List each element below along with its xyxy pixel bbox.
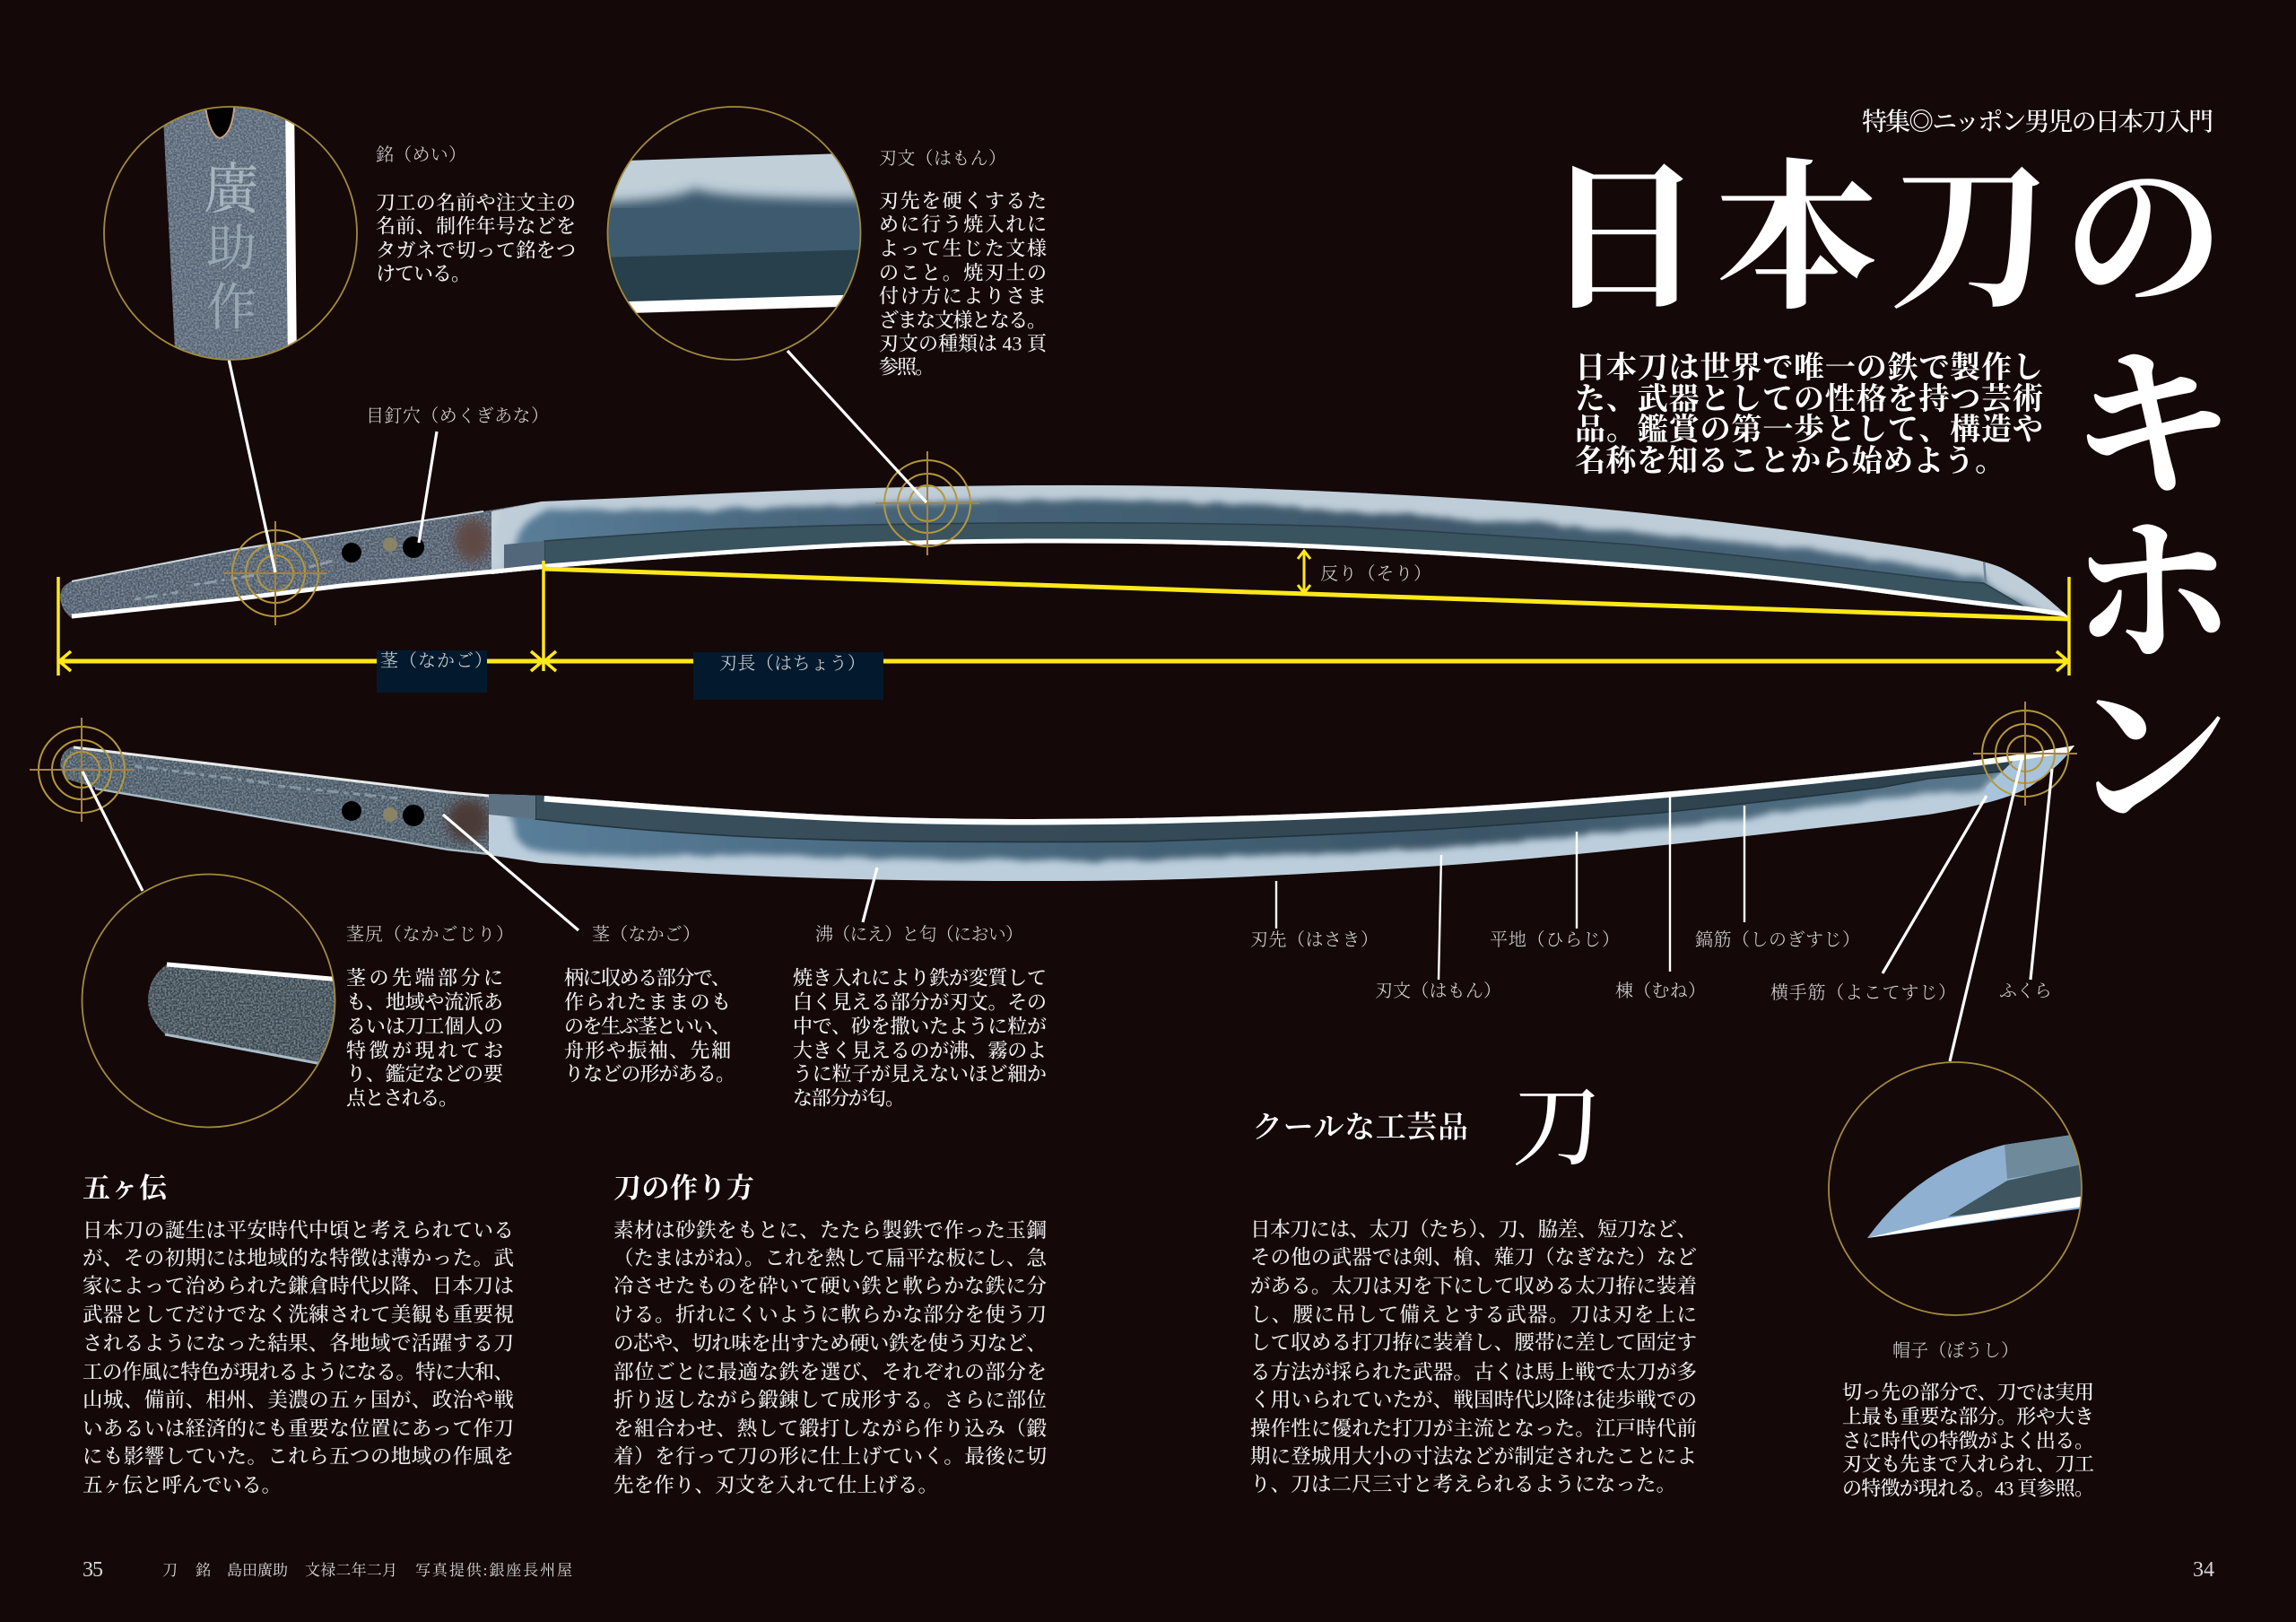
- column: katana types: る方法が採られた武器。古くは馬上戦で太刀が多: [1250, 1361, 1697, 1383]
- column: how swords are made: 部位ごとに最適な鉄を選び、それぞれの部分を: [613, 1361, 1047, 1383]
- column: gokaden: [83, 1173, 514, 1496]
- lead paragraph: 品。鑑賞の第一歩として、構造や: [1575, 413, 2043, 447]
- text: nie and nioi: うに粒子が見えないほど細か: [793, 1062, 1047, 1086]
- text: nakagojiri: 茎の先端部分に: [346, 967, 503, 989]
- column: katana types: その他の武器では剣、槍、薙刀（なぎなた）など: [1250, 1246, 1697, 1269]
- column: how swords are made: の芯や、切れ味を出すため硬い鉄を使う刃など、: [613, 1332, 1047, 1355]
- label box: blade length: 刃長（はちょう）: [719, 653, 865, 674]
- text: nakagojiri: 点とされる。: [346, 1087, 458, 1109]
- footer: photo caption: 刀: [162, 1562, 178, 1579]
- part labels under lower sword: 棟（むね）: [1615, 981, 1706, 1001]
- close-up photo: [608, 154, 860, 313]
- title: ン: [2068, 670, 2230, 849]
- column: gokaden: 工の作風に特色が現れるようになる。特に大和、: [83, 1361, 514, 1383]
- leader lines: [83, 351, 2052, 1061]
- close-up photo: 作: [206, 281, 257, 336]
- footer: photo caption: 写真提供:銀座長州屋: [415, 1562, 572, 1579]
- text: nie and nioi: 中で、砂を撒いたように粒が: [793, 1016, 1047, 1037]
- close-up photo: [162, 99, 297, 368]
- label box: blade length: [693, 652, 883, 700]
- close-up photo: 廣: [204, 160, 262, 221]
- column: katana types: [1250, 1218, 1697, 1496]
- lead paragraph: [1575, 351, 2043, 478]
- panel: nakagojiri close-up: [83, 874, 341, 1127]
- close-up photo: [1867, 1132, 2090, 1238]
- part labels under lower sword: 横手筋（よこてすじ）: [1770, 982, 1956, 1003]
- text: mei: けている。: [376, 262, 471, 285]
- label: sori: 反り（そり）: [1320, 564, 1431, 584]
- part labels under lower sword: 平地（ひらじ）: [1490, 929, 1620, 950]
- text: mei: 銘（めい）: [376, 144, 466, 165]
- text: nie and nioi: 大きく見えるのが沸、霧のよ: [793, 1039, 1047, 1062]
- text: mei: タガネで切って銘をつ: [376, 239, 576, 262]
- column: gokaden: 武器としてだけでなく洗練されて美観も重要視: [83, 1304, 514, 1326]
- target: nakagojiri: [30, 718, 134, 822]
- label: mekugi-ana: 目釘穴（めくぎあな）: [366, 406, 549, 426]
- panel: mei close-up: [104, 99, 357, 368]
- text: nie and nioi: な部分が匂。: [793, 1087, 905, 1109]
- text: nakago: 作られたままのも: [564, 990, 731, 1014]
- column: how swords are made: 先を作り、刃文を入れて仕上げる。: [613, 1474, 938, 1496]
- heading: katana: [1252, 1078, 1602, 1178]
- text: nie and nioi: 沸（にえ）と匂（におい）: [815, 924, 1023, 945]
- text: hamon: のこと。焼刃土の: [879, 262, 1047, 283]
- footer: photo caption: 文禄二年二月: [305, 1561, 397, 1579]
- tang: [60, 746, 541, 861]
- text: hamon: よって生じた文様: [879, 237, 1047, 260]
- text: mei: 刀工の名前や注文主の: [376, 192, 576, 214]
- sword: upper, edge up: [60, 484, 2068, 619]
- kicker: feature heading: 特集◎ニッポン男児の日本刀入門: [1862, 108, 2213, 136]
- sword: lower, edge down: [60, 746, 2074, 881]
- column: katana types: 日本刀には、太刀（たち）、刀、脇差、短刀など、: [1250, 1218, 1697, 1241]
- text: hamon: 刃先を硬くするた: [879, 190, 1047, 212]
- frame: [608, 107, 861, 360]
- text: boshi: の特徴が現れる。43 頁参照。: [1842, 1477, 2094, 1500]
- text: hamon: [879, 148, 1048, 379]
- lead paragraph: た、武器としての性格を持つ芸術: [1575, 382, 2043, 416]
- column: gokaden: 五ヶ伝: [83, 1173, 170, 1204]
- column: katana types: して収める打刀拵に装着し、腰帯に差して固定す: [1250, 1331, 1697, 1354]
- target: boshi: [1973, 702, 2077, 806]
- frame: [1829, 1062, 2082, 1315]
- text: hamon: 刃文（はもん）: [879, 148, 1006, 169]
- text: nie and nioi: 焼き入れにより鉄が変質して: [793, 967, 1047, 989]
- footer: photo caption: [162, 1561, 572, 1579]
- label box: nakago: 茎（なかご）: [380, 650, 492, 671]
- column: katana types: し、腰に吊して備えとする武器。刀は刃を上に: [1250, 1304, 1697, 1326]
- text: hamon: 参照。: [879, 355, 935, 379]
- text: boshi: 刃文も先まで入れられ、刀工: [1842, 1453, 2094, 1475]
- blade: [491, 484, 2068, 617]
- column: how swords are made: 冷させたものを砕いて硬い鉄と軟らかな鉄に分: [613, 1275, 1047, 1297]
- text: hamon: めに行う焼入れに: [879, 214, 1047, 235]
- heading: katana: クールな工芸品: [1252, 1111, 1468, 1145]
- text: nakago: 茎（なかご）: [592, 924, 700, 945]
- column: gokaden: いあるいは経済的にも重要な位置にあって作刀: [83, 1417, 514, 1440]
- tang: [60, 501, 542, 618]
- column: how swords are made: 刀の作り方: [613, 1173, 754, 1204]
- footer: photo caption: 島田廣助: [227, 1562, 288, 1579]
- text: nakagojiri: り、鑑定などの要: [346, 1062, 503, 1086]
- text: nie and nioi: 白く見える部分が刃文。その: [793, 990, 1047, 1014]
- lead paragraph: 日本刀は世界で唯一の鉄で製作し: [1575, 351, 2043, 385]
- column: how swords are made: を組合わせ、熱して鍛打しながら作り込み（鍛: [613, 1417, 1047, 1440]
- text: boshi: 上最も重要な部分。形や大き: [1842, 1405, 2094, 1428]
- arrow: sori: [1298, 551, 1310, 593]
- column: katana types: がある。太刀は刃を下にして収める太刀拵に装着: [1250, 1275, 1697, 1297]
- text: nie and nioi: [793, 924, 1047, 1109]
- text: hamon: 刃文の種類は 43 頁: [879, 332, 1048, 355]
- label box: nakago: [377, 650, 492, 693]
- column: katana types: く用いられていたが、戦国時代以降は徒歩戦での: [1250, 1389, 1697, 1411]
- frame: [83, 874, 335, 1127]
- panel: hamon close-up: [601, 107, 870, 368]
- text: nakagojiri: も、地域や流派あ: [346, 990, 503, 1014]
- column: how swords are made: ける。折れにくいように軟らかな部分を使う刀: [613, 1304, 1047, 1326]
- title: 日本刀の: [1543, 151, 2224, 329]
- text: nakago: りなどの形がある。: [564, 1062, 735, 1086]
- text: hamon: 付け方によりさま: [879, 285, 1047, 307]
- part labels under lower sword: 刃文（はもん）: [1375, 981, 1501, 1001]
- text: mei: [376, 144, 576, 285]
- footer: page number right: 34: [2193, 1558, 2214, 1582]
- panel: boshi close-up: [1829, 1062, 2090, 1315]
- column: how swords are made: [613, 1173, 1048, 1496]
- column: gokaden: 山城、備前、相州、美濃の五ヶ国が、政治や戦: [83, 1389, 514, 1411]
- lead paragraph: 名称を知ることから始めよう。: [1575, 444, 2005, 478]
- text: nakago: [564, 924, 735, 1086]
- part labels under lower sword: 鎬筋（しのぎすじ）: [1695, 929, 1860, 950]
- column: katana types: 操作性に優れた打刀が主流となった。江戸時代前: [1250, 1417, 1697, 1440]
- close-up photo: 助: [206, 222, 257, 277]
- part labels under lower sword: ふくら: [1999, 981, 2052, 1001]
- column: how swords are made: （たまはがね）。これを熱して扁平な板にし、急: [613, 1247, 1048, 1269]
- text: hamon: ざまな文様となる。: [879, 309, 1047, 332]
- footer: page number left: 35: [83, 1558, 103, 1582]
- footer: photo caption: 銘: [196, 1562, 211, 1579]
- text: boshi: 切っ先の部分で、刀では実用: [1842, 1382, 2094, 1403]
- column: katana types: 期に登城用大小の寸法などが制定されたことによ: [1250, 1445, 1697, 1468]
- frame: [104, 107, 357, 360]
- close-up photo: [148, 964, 341, 1068]
- column: gokaden: にも影響していた。これら五つの地域の作風を: [83, 1445, 514, 1468]
- text: nakago: のを生ぶ茎といい、: [564, 1016, 731, 1037]
- target: hamon: [875, 451, 979, 555]
- column: gokaden: されるようになった結果、各地域で活躍する刀: [83, 1332, 514, 1355]
- target: nakago mei: [223, 521, 327, 625]
- measuring lines: yellow: [58, 561, 2069, 676]
- text: boshi: 帽子（ぼうし）: [1892, 1340, 2019, 1361]
- text: mei: 名前、制作年号などを: [376, 215, 576, 237]
- column: gokaden: 家によって治められた鎌倉時代以降、日本刀は: [83, 1275, 514, 1297]
- text: boshi: さに時代の特徴がよく出る。: [1842, 1430, 2094, 1452]
- text: nakagojiri: [346, 924, 514, 1109]
- title: キ: [2072, 338, 2233, 517]
- column: how swords are made: 着）を行って刀の形に仕上げていく。最後に切: [613, 1445, 1047, 1468]
- blade: [489, 746, 2074, 881]
- column: gokaden: 五ヶ伝と呼んでいる。: [83, 1474, 282, 1496]
- column: how swords are made: 折り返しながら鍛錬して成形する。さらに部位: [613, 1389, 1047, 1411]
- title: ホ: [2072, 504, 2233, 683]
- text: nakagojiri: 特徴が現れてお: [346, 1039, 503, 1062]
- part labels under lower sword: 刃先（はさき）: [1250, 929, 1378, 950]
- column: katana types: り、刀は二尺三寸と考えられるようになった。: [1250, 1473, 1676, 1496]
- text: boshi: [1842, 1340, 2094, 1500]
- part labels under lower sword: [1250, 929, 2052, 1003]
- column: gokaden: 日本刀の誕生は平安時代中頃と考えられている: [83, 1219, 514, 1242]
- text: nakago: 舟形や振袖、先細: [564, 1039, 731, 1062]
- text: nakago: 柄に収める部分で、: [564, 967, 731, 989]
- column: how swords are made: 素材は砂鉄をもとに、たたら製鉄で作った玉鋼: [613, 1219, 1047, 1242]
- title: [1543, 151, 2233, 849]
- text: nakagojiri: 茎尻（なかごじり）: [346, 924, 514, 945]
- text: nakagojiri: るいは刀工個人の: [346, 1016, 503, 1037]
- heading: katana: 刀: [1512, 1078, 1602, 1178]
- column: gokaden: が、その初期には地域的な特徴は薄かった。武: [83, 1247, 514, 1269]
